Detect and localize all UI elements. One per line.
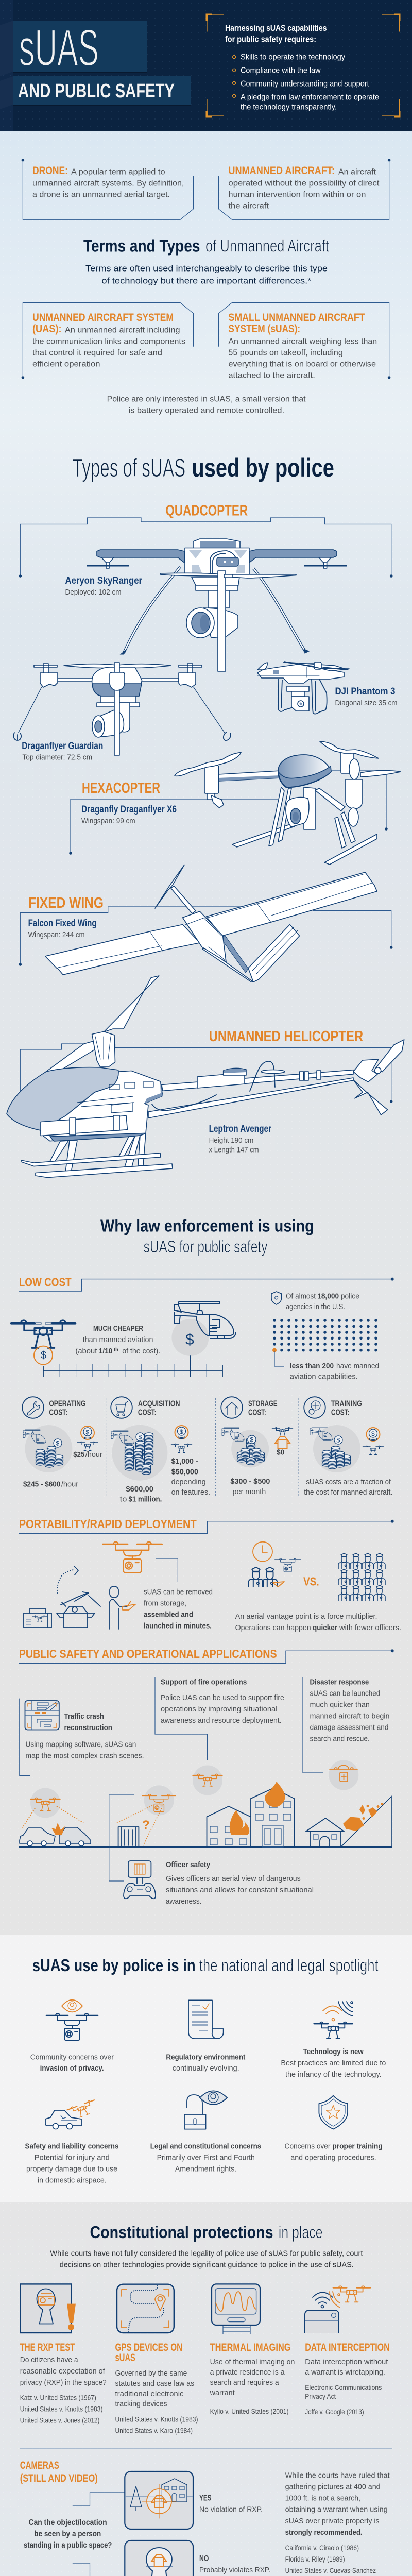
panel: thermal imaging: search and requires a	[210, 2378, 279, 2387]
text: disaster response: search and rescue.	[310, 1734, 370, 1743]
panel: GPS devices: statutes and case law as	[115, 2379, 194, 2388]
label: Falcon Fixed Wing: Falcon Fixed Wing	[28, 918, 97, 929]
label: Falcon Fixed Wing: Wingspan: 244 cm	[28, 930, 85, 939]
panel: data interception	[305, 2286, 390, 2416]
panel: training cost: $	[371, 1430, 375, 1437]
panel: fixed wing frame: FIXED WING	[28, 895, 104, 911]
panel: RXP test: reasonable expectation of	[20, 2367, 105, 2376]
label: DJI Phantom 3	[335, 686, 398, 707]
panel: acquisition cost: to	[120, 1495, 127, 1504]
illustration: storage to launch: assembled and	[144, 1611, 193, 1619]
illustration: street scene	[19, 1760, 392, 1881]
panel: thermal imaging	[210, 2284, 295, 2415]
panel: training cost: $	[337, 1436, 340, 1444]
callout: requirements with orange brackets: Skills to operate the technology	[241, 53, 345, 61]
dividers between costs	[106, 1398, 299, 1497]
panel: sUAS definition	[218, 303, 390, 380]
panel: acquisition cost: $1,000 -	[171, 1457, 198, 1466]
panel: cameras: NO	[199, 2554, 209, 2563]
illustration: storage to launch: launched in minutes.	[144, 1622, 212, 1630]
icon: helicopter with dollar	[171, 1302, 236, 1370]
illustration: storage to launch: sUAS can be removed	[144, 1588, 213, 1597]
heading: terms and types: of Unmanned Aircraft	[205, 236, 329, 256]
panel: acquisition cost: $	[180, 1428, 183, 1435]
text: terms intro: of technology but there are important differences.*	[101, 276, 312, 285]
text: officer safety: situations and allows for constant situational	[166, 1886, 314, 1894]
concern: new technology: Best practices are limited due to	[281, 2059, 386, 2067]
concern: regulatory: continually evolving.	[173, 2064, 239, 2073]
text: traffic crash reconstruction: Traffic crash	[64, 1712, 104, 1721]
panel: cameras: be seen by a person	[34, 2530, 101, 2538]
text: traffic crash reconstruction: reconstruction	[64, 1723, 112, 1732]
panel: training cost: the cost for manned aircraft.	[304, 1488, 392, 1497]
stat: police agencies dot grid: police	[341, 1292, 359, 1301]
concern: regulatory: Regulatory environment	[166, 2053, 245, 2061]
panel: data interception: Privacy Act	[305, 2392, 336, 2400]
illustration: street scene: ?	[142, 1818, 150, 1832]
panel: unmanned aircraft definition: An aircraft	[338, 168, 376, 177]
text: police interest note: Police are only interested in sUAS, a small version that	[107, 395, 306, 404]
concern: safety and liability: property damage due to use	[26, 2165, 117, 2174]
text: much cheaper: 1/10	[99, 1347, 112, 1355]
label: Falcon Fixed Wing	[28, 918, 97, 939]
text: courts intro	[50, 2249, 363, 2269]
section heading: low cost	[19, 1276, 394, 1291]
label: Aeryon SkyRanger	[65, 575, 143, 597]
panel: drone definition: DRONE:	[32, 165, 68, 177]
title: AND PUBLIC SAFETY	[18, 80, 175, 102]
panel: training cost: COST:	[331, 1409, 350, 1417]
icon: drone with dollar	[11, 1320, 75, 1365]
panel: operating cost: $25	[73, 1450, 84, 1459]
panel: acquisition cost: depending	[171, 1478, 206, 1486]
label: Draganflyer Guardian: Top diameter: 72.5 cm	[22, 753, 92, 761]
panel: GPS devices: United States v. Karo (1984)	[115, 2427, 193, 2435]
text: disaster response: manned aircraft to begin	[310, 1711, 389, 1721]
panel: UAS definition: An unmanned aircraft including	[65, 326, 180, 335]
text: much cheaper: (about	[75, 1347, 97, 1355]
panel: operating cost: /hour	[85, 1450, 102, 1459]
text: traffic crash reconstruction	[20, 1699, 144, 1775]
text: officer safety	[124, 1860, 314, 1906]
panel: thermal imaging: warrant	[210, 2388, 235, 2397]
label: Aeryon SkyRanger: Aeryon SkyRanger	[65, 575, 143, 586]
text: police interest note: is battery operated and remote controlled.	[129, 406, 284, 415]
section heading: portability	[19, 1517, 394, 1534]
panel: cameras: strongly recommended.	[285, 2528, 363, 2537]
panel: operating cost: COST:	[49, 1409, 67, 1417]
chart: cost comparison scale	[43, 1364, 222, 1377]
heading: constitutional protections: Constitutional protections	[90, 2223, 273, 2242]
panel: unmanned aircraft definition: the aircraft	[228, 202, 269, 211]
panel: cameras	[20, 2460, 390, 2576]
panel: training cost: TRAINING	[331, 1399, 362, 1409]
drone: hexacopter	[175, 741, 401, 865]
heading: terms and types	[83, 236, 329, 256]
section heading: public safety applications	[19, 1647, 394, 1663]
panel: acquisition cost: $600,00	[126, 1485, 153, 1494]
panel: RXP test: THE RXP TEST	[20, 2342, 75, 2353]
drone: Draganflyer Guardian	[13, 663, 231, 761]
text: support of fire operations: operations by improving situational	[161, 1705, 277, 1714]
concern: legal and constitutional: Amendment rights.	[175, 2165, 236, 2174]
panel: UAS definition: that control it required for safe and	[32, 349, 162, 358]
panel: storage cost: STORAGE	[248, 1399, 278, 1409]
panel: storage cost: $	[250, 1436, 253, 1444]
panel: storage cost: $0	[277, 1448, 284, 1457]
illustration: force multiplier	[235, 1542, 401, 1632]
text: much cheaper: th	[114, 1347, 118, 1353]
panel: quadcopter frame: QUADCOPTER	[165, 503, 248, 519]
panel: GPS devices: sUAS	[115, 2352, 135, 2364]
illustration: storage to launch	[24, 1542, 213, 1630]
illustration: force multiplier: VS.	[303, 1575, 319, 1588]
panel: quadcopter frame	[19, 503, 392, 578]
text: support of fire operations: Police UAS can be used to support fire	[161, 1693, 284, 1702]
concern: legal and constitutional: Legal and constitutional concerns	[150, 2142, 261, 2151]
panel: sUAS definition: attached to the aircraft.	[228, 371, 315, 380]
panel: cameras: While the courts have ruled that	[285, 2471, 390, 2480]
concern: safety and liability: in domestic airspace.	[38, 2176, 107, 2185]
panel: GPS devices	[115, 2284, 198, 2435]
callout: requirements with orange brackets	[206, 13, 401, 117]
panel: acquisition cost: $1 million.	[129, 1495, 162, 1504]
panel: GPS devices: United States v. Knotts (1983)	[115, 2415, 198, 2424]
panel: drone definition	[22, 159, 193, 219]
heading: terms and types: Terms and Types	[83, 236, 200, 256]
text: disaster response: sUAS can be launched	[310, 1689, 380, 1698]
concern: proper training	[285, 2096, 383, 2162]
text: officer safety: awareness.	[166, 1897, 201, 1906]
panel: operating cost: /hour	[61, 1480, 78, 1489]
panel: acquisition cost: $50,000	[171, 1467, 198, 1476]
panel: operating cost: $245 - $600	[23, 1480, 60, 1489]
concern: proper training: proper training	[332, 2142, 383, 2151]
label: Leptron Avenger	[209, 1124, 271, 1155]
panel: sUAS definition: An unmanned aircraft weighing less than	[228, 337, 377, 346]
label: DJI Phantom 3: Diagonal size 35 cm	[335, 699, 398, 707]
panel: RXP test	[20, 2284, 107, 2425]
section heading: public safety applications: PUBLIC SAFETY AND OPERATIONAL APPLICATIONS	[19, 1647, 277, 1660]
panel: RXP test: United States v. Knotts (1983)	[20, 2405, 102, 2413]
panel: acquisition cost: $	[138, 1433, 142, 1440]
text: officer safety: Officer safety	[166, 1860, 211, 1869]
panel: cameras: standing in a public space?	[24, 2541, 112, 2550]
label: Leptron Avenger: Leptron Avenger	[209, 1124, 271, 1134]
panel: unmanned helicopter frame	[20, 1028, 393, 1155]
panel: cameras: gathering pictures at 400 and	[285, 2482, 381, 2492]
panel: unmanned aircraft definition: UNMANNED AIRCRAFT:	[228, 165, 335, 177]
stat: police agencies dot grid: Of almost	[286, 1292, 316, 1301]
label: Leptron Avenger: Height 190 cm	[209, 1136, 253, 1145]
label: Draganflyer X6: Wingspan: 99 cm	[81, 817, 135, 825]
panel: cameras: YES	[199, 2494, 212, 2503]
panel: acquisition cost: on features.	[171, 1488, 210, 1497]
callout: requirements with orange brackets: Compliance with the law	[241, 66, 321, 75]
concern: proper training: and operating procedures.	[290, 2154, 376, 2162]
text: courts intro: decisions on other technologies provide significant guidance to police in the use of sUAS.	[60, 2261, 354, 2269]
panel: training cost: sUAS costs are a fraction of	[306, 1478, 391, 1486]
heading: types of sUAS: Types of sUAS	[73, 453, 185, 482]
panel: operating cost: $	[56, 1439, 60, 1447]
concern: safety and liability: Safety and liability concerns	[25, 2142, 118, 2151]
section heading: low cost: LOW COST	[19, 1276, 72, 1289]
text: much cheaper: than manned aviation	[83, 1335, 153, 1344]
illustration: force multiplier: quicker	[313, 1623, 337, 1632]
concern: new technology	[281, 2002, 386, 2079]
heading: national and legal spotlight	[32, 1956, 379, 1975]
panel: unmanned aircraft definition: human intervention from within or on	[228, 191, 366, 199]
drone: unmanned helicopter	[7, 976, 404, 1178]
label: Aeryon SkyRanger: Deployed: 102 cm	[65, 588, 122, 597]
panel: cameras: sUAS over private property is	[285, 2517, 380, 2526]
panel: drone definition: a drone is an unmanned aerial target.	[32, 191, 170, 199]
label: Leptron Avenger: x Length 147 cm	[209, 1146, 259, 1155]
icon: drone with dollar: $	[41, 1350, 46, 1361]
panel: acquisition cost: ACQUISITION	[138, 1399, 180, 1409]
panel: hexacopter frame: HEXACOPTER	[82, 780, 160, 796]
panel: acquisition cost: COST:	[138, 1409, 157, 1417]
panel: RXP test: Katz v. United States (1967)	[20, 2394, 96, 2402]
illustration: storage to launch: from storage,	[144, 1599, 186, 1607]
panel: UAS definition: (UAS):	[32, 323, 62, 335]
drone: DJI Phantom 3	[258, 662, 398, 714]
panel: data interception: a warrant is wiretapping.	[305, 2368, 385, 2377]
text: traffic crash reconstruction: Using mapping software, sUAS can	[26, 1740, 136, 1749]
concern: legal and constitutional	[150, 2091, 261, 2174]
label: Draganflyer X6	[81, 804, 177, 825]
panel: UAS definition: the communication links and components	[32, 337, 185, 346]
heading: why law enforcement: sUAS for public safety	[144, 1237, 268, 1256]
text: courts intro: While courts have not fully considered the legality of police use of sUAS for public safety, court	[50, 2249, 363, 2258]
callout: requirements with orange brackets: the technology transparently.	[241, 103, 337, 111]
concern: privacy: Community concerns over	[30, 2053, 114, 2061]
panel: GPS devices: Governed by the same	[115, 2369, 187, 2378]
panel: sUAS definition: 55 pounds on takeoff, including	[228, 349, 343, 358]
text: support of fire operations	[155, 1677, 284, 1760]
text: disaster response: Disaster response	[310, 1678, 369, 1687]
panel: hexacopter frame	[69, 771, 388, 855]
text: terms intro	[85, 264, 328, 285]
stat: police agencies dot grid: have manned	[336, 1362, 379, 1370]
callout: requirements with orange brackets: for public safety requires:	[225, 34, 316, 44]
text: disaster response: damage assessment and	[310, 1723, 388, 1732]
illustration: force multiplier: An aerial vantage point is a force multiplier.	[235, 1612, 377, 1621]
text: terms intro: Terms are often used interchangeably to describe this type	[85, 264, 328, 274]
panel: thermal imaging: THERMAL IMAGING	[210, 2342, 291, 2353]
illustration: force multiplier: with fewer officers.	[339, 1623, 401, 1632]
concern: privacy	[30, 2000, 114, 2073]
panel: storage cost	[221, 1397, 293, 1496]
panel: data interception: Data interception without	[305, 2358, 388, 2366]
panel: data interception: Joffe v. Google (2013)	[305, 2408, 364, 2416]
panel: cameras: (STILL AND VIDEO)	[20, 2472, 98, 2484]
panel: thermal imaging: a private residence is a	[210, 2368, 285, 2377]
panel: operating cost	[22, 1397, 102, 1489]
panel: GPS devices: traditional electronic	[115, 2389, 184, 2398]
panel: fixed wing frame	[19, 895, 392, 966]
panel: thermal imaging: Kyllo v. United States (2001)	[210, 2407, 289, 2415]
text: much cheaper	[75, 1324, 160, 1355]
panel: RXP test: privacy (RXP) in the space?	[20, 2378, 107, 2387]
heading: constitutional protections: in place	[279, 2223, 322, 2242]
stat: police agencies dot grid	[271, 1292, 379, 1381]
concern: proper training: Concerns over	[285, 2142, 330, 2151]
heading: why law enforcement: Why law enforcement is using	[100, 1216, 314, 1235]
text: officer safety: Gives officers an aerial view of dangerous	[166, 1874, 301, 1883]
panel: training cost	[304, 1397, 392, 1497]
illustration: force multiplier: Operations can happen	[235, 1623, 311, 1632]
panel: storage cost: per month	[233, 1487, 266, 1496]
text: traffic crash reconstruction: map the most complex crash scenes.	[26, 1752, 144, 1760]
label: Draganflyer Guardian	[22, 741, 103, 761]
concern: legal and constitutional: Primarily over First and Fourth	[157, 2154, 255, 2162]
panel: data interception: Electronic Communications	[305, 2383, 382, 2392]
label: Draganflyer Guardian: Draganflyer Guardian	[22, 741, 103, 752]
panel: sUAS definition: everything that is on board or otherwise	[228, 360, 376, 369]
title: sUAS	[19, 19, 99, 77]
panel: UAS definition: UNMANNED AIRCRAFT SYSTEM	[32, 312, 174, 324]
panel: storage cost: $300 - $500	[230, 1477, 270, 1486]
panel: unmanned helicopter frame: UNMANNED HELICOPTER	[209, 1028, 363, 1045]
heading: why law enforcement	[100, 1216, 314, 1256]
panel: acquisition cost	[111, 1397, 210, 1504]
panel: sUAS definition: SYSTEM (sUAS):	[228, 323, 300, 335]
concern: safety and liability	[25, 2099, 118, 2185]
section heading: portability: PORTABILITY/RAPID DEPLOYMENT	[19, 1517, 197, 1531]
panel: cameras: Florida v. Riley (1989)	[285, 2555, 345, 2563]
heading: types of sUAS: used by police	[192, 453, 334, 482]
text: disaster response	[303, 1677, 389, 1773]
callout: requirements with orange brackets: A pledge from law enforcement to operate	[241, 93, 379, 101]
panel: drone definition: unmanned aircraft systems. By definition,	[32, 179, 184, 188]
heading: national and legal spotlight: sUAS use by police is in	[32, 1956, 196, 1975]
panel: drone definition: A popular term applied to	[71, 168, 165, 177]
text: police interest note	[107, 395, 306, 415]
stat: police agencies dot grid: aviation capabilities.	[290, 1372, 358, 1381]
panel: cameras: Probably violates RXP.	[199, 2566, 270, 2574]
panel: cameras: 1000 ft. is not a search,	[285, 2494, 360, 2503]
callout: requirements with orange brackets: Harnessing sUAS capabilities	[225, 23, 327, 33]
panel: UAS definition	[22, 303, 193, 379]
stat: police agencies dot grid: agencies in the U.S.	[286, 1302, 345, 1311]
panel: unmanned aircraft definition	[218, 159, 390, 219]
panel: GPS devices: GPS DEVICES ON	[115, 2342, 182, 2353]
panel: cameras: United States v. Cuevas-Sanchez	[285, 2566, 376, 2574]
panel: unmanned aircraft definition: operated without the possibility of direct	[228, 179, 380, 188]
stat: police agencies dot grid: less than 200	[290, 1362, 334, 1370]
panel: operating cost: OPERATING	[49, 1399, 85, 1409]
text: support of fire operations: Support of fire operations	[161, 1678, 247, 1687]
heading: types of sUAS	[73, 453, 334, 482]
label: Draganflyer X6: Draganfly Draganflyer X6	[81, 804, 177, 815]
panel: sUAS definition: SMALL UNMANNED AIRCRAFT	[228, 312, 365, 324]
icon: helicopter with dollar: $	[185, 1331, 194, 1348]
concern: new technology: the infancy of the technology.	[285, 2070, 382, 2079]
concern: new technology: Technology is new	[303, 2047, 364, 2056]
stat: police agencies dot grid: 18,000	[317, 1292, 339, 1301]
panel: cameras: California v. Ciraolo (1986)	[285, 2544, 359, 2552]
text: much cheaper: MUCH CHEAPER	[93, 1324, 143, 1333]
panel: GPS devices: tracking devices	[115, 2400, 167, 2409]
concern: privacy: invasion of privacy.	[40, 2064, 104, 2073]
panel: thermal imaging: Use of thermal imaging on	[210, 2358, 295, 2366]
text: support of fire operations: awareness and resource deployment.	[161, 1716, 282, 1725]
panel: cameras: obtaining a warrant when using	[285, 2505, 388, 2514]
panel: header	[0, 0, 412, 131]
concern: safety and liability: Potential for injury and	[35, 2154, 110, 2162]
concern: regulatory	[166, 2000, 245, 2073]
panel: UAS definition: efficient operation	[32, 360, 100, 369]
title	[18, 19, 175, 102]
panel: operating cost: $	[85, 1429, 90, 1436]
panel: cameras: Can the object/location	[29, 2518, 107, 2527]
panel: cameras: CAMERAS	[20, 2460, 59, 2471]
text: much cheaper: of the cost).	[122, 1347, 160, 1355]
panel: storage cost: COST:	[248, 1409, 266, 1417]
panel: cameras: No violation of RXP.	[199, 2505, 263, 2514]
text: disaster response: much quicker than	[310, 1700, 370, 1709]
drone: Aeryon SkyRanger	[65, 539, 347, 671]
drone: fixed wing	[45, 865, 377, 982]
callout: requirements with orange brackets: Community understanding and support	[241, 79, 369, 88]
panel: RXP test: United States v. Jones (2012)	[20, 2416, 99, 2425]
panel: RXP test: Do citizens have a	[20, 2355, 78, 2364]
label: DJI Phantom 3: DJI Phantom 3	[335, 686, 396, 697]
